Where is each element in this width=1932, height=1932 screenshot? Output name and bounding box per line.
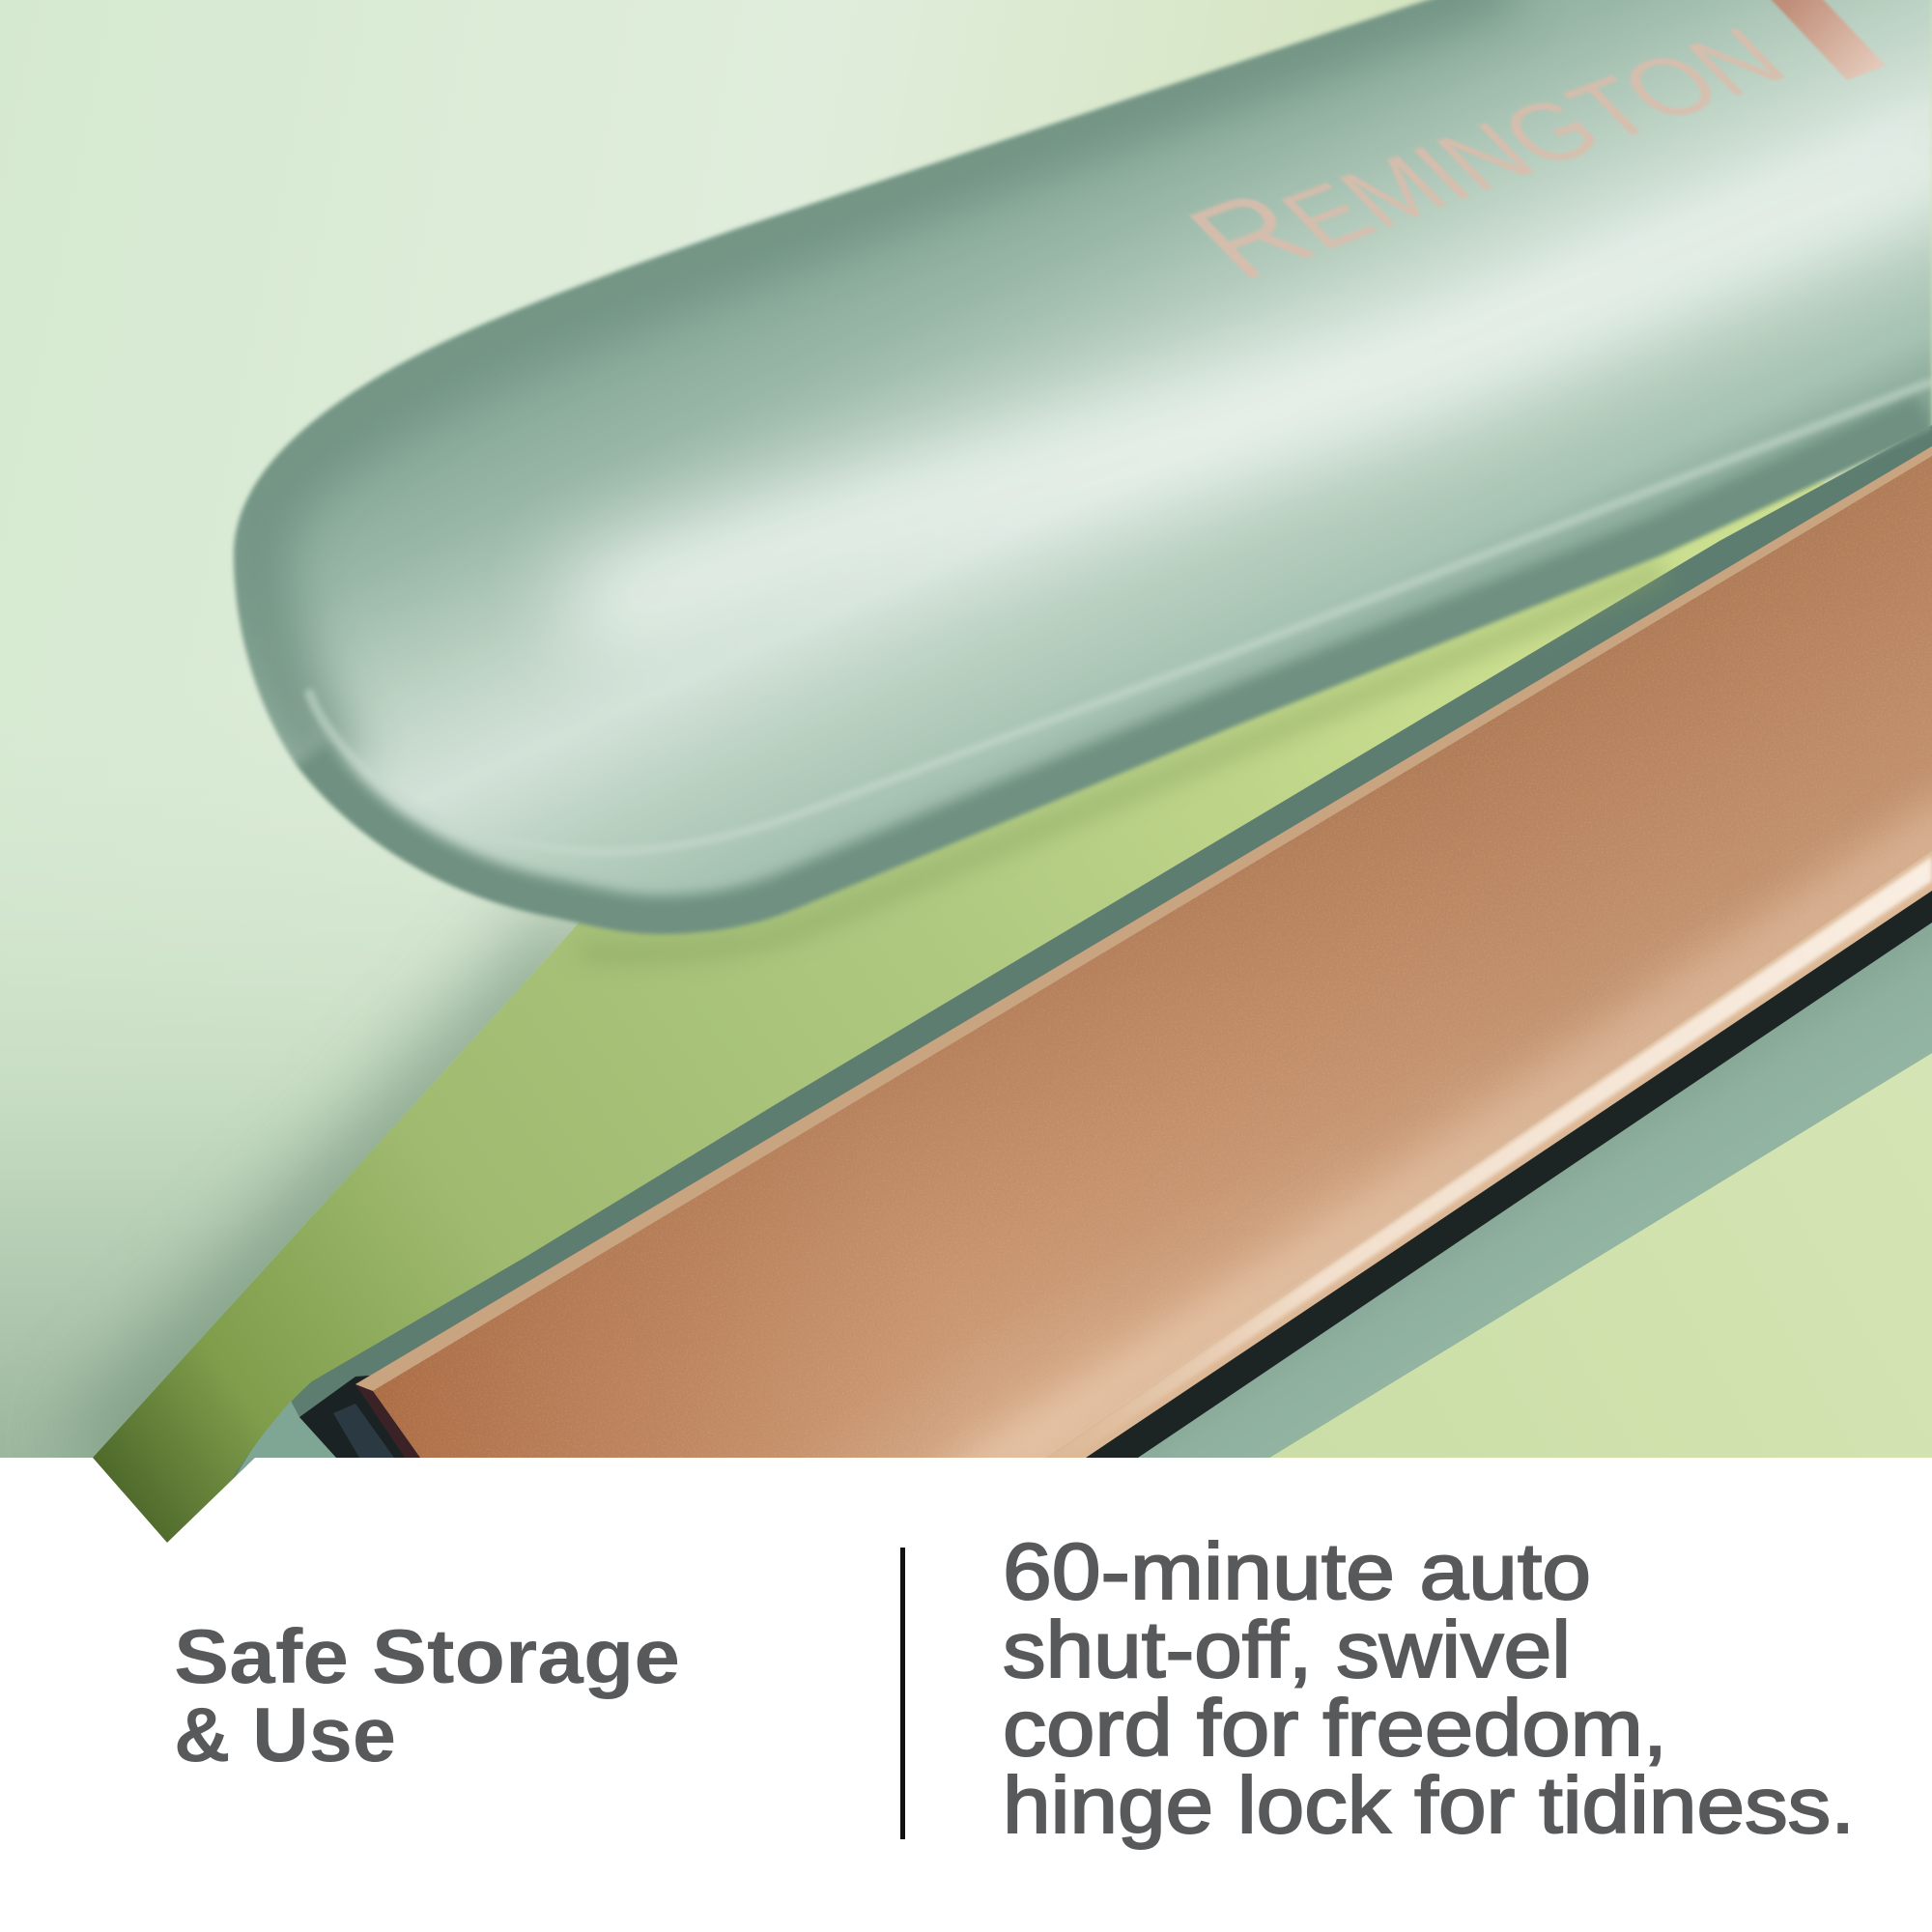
plate: reflection stripe: [1047, 850, 1932, 1458]
plate: front dark edge: [355, 1384, 420, 1458]
inner dark block: [333, 1404, 394, 1458]
plate: copper face: [355, 446, 1932, 1458]
heading: Safe Storage & Use: Safe Storage: [174, 1613, 680, 1699]
photo: green plane under the iron: [93, 483, 1932, 1543]
heading: Safe Storage & Use: & Use: [174, 1691, 396, 1777]
frame: teal end cap: [235, 1401, 340, 1478]
handle: highlight band: [580, 145, 1932, 618]
description text: [1003, 1526, 1855, 1850]
plate: top bevel: [355, 446, 1932, 1392]
description text: 60-minute auto: [1003, 1526, 1591, 1616]
divider: [900, 1548, 905, 1839]
photo: upper handle: [234, 0, 1932, 934]
handle: lip highlight: [308, 382, 1932, 852]
heading: Safe Storage & Use: [174, 1613, 680, 1777]
handle: lower lip: [296, 430, 1932, 934]
logo: REMINGTON: REMINGTON: [1161, 0, 1811, 302]
handle: dark top and rounded end: [253, 0, 1507, 773]
photo: iron lower frame and plate: [232, 425, 1932, 1488]
photo: background surface: [0, 0, 1932, 1546]
logo bar: [1770, 0, 1886, 80]
frame: lower right rail: [1138, 923, 1932, 1458]
description text: shut-off, swivel: [1003, 1605, 1571, 1694]
plate: grain texture: [355, 446, 1932, 1488]
photo: handle soft shadow on plane: [580, 570, 1663, 953]
slot: dark gap: [299, 1372, 425, 1458]
description text: hinge lock for tidiness.: [1003, 1760, 1855, 1850]
frame: lower arm outer body: [232, 425, 1932, 1478]
white caption panel with notch: [0, 1458, 1932, 1932]
description text: cord for freedom,: [1003, 1683, 1667, 1773]
